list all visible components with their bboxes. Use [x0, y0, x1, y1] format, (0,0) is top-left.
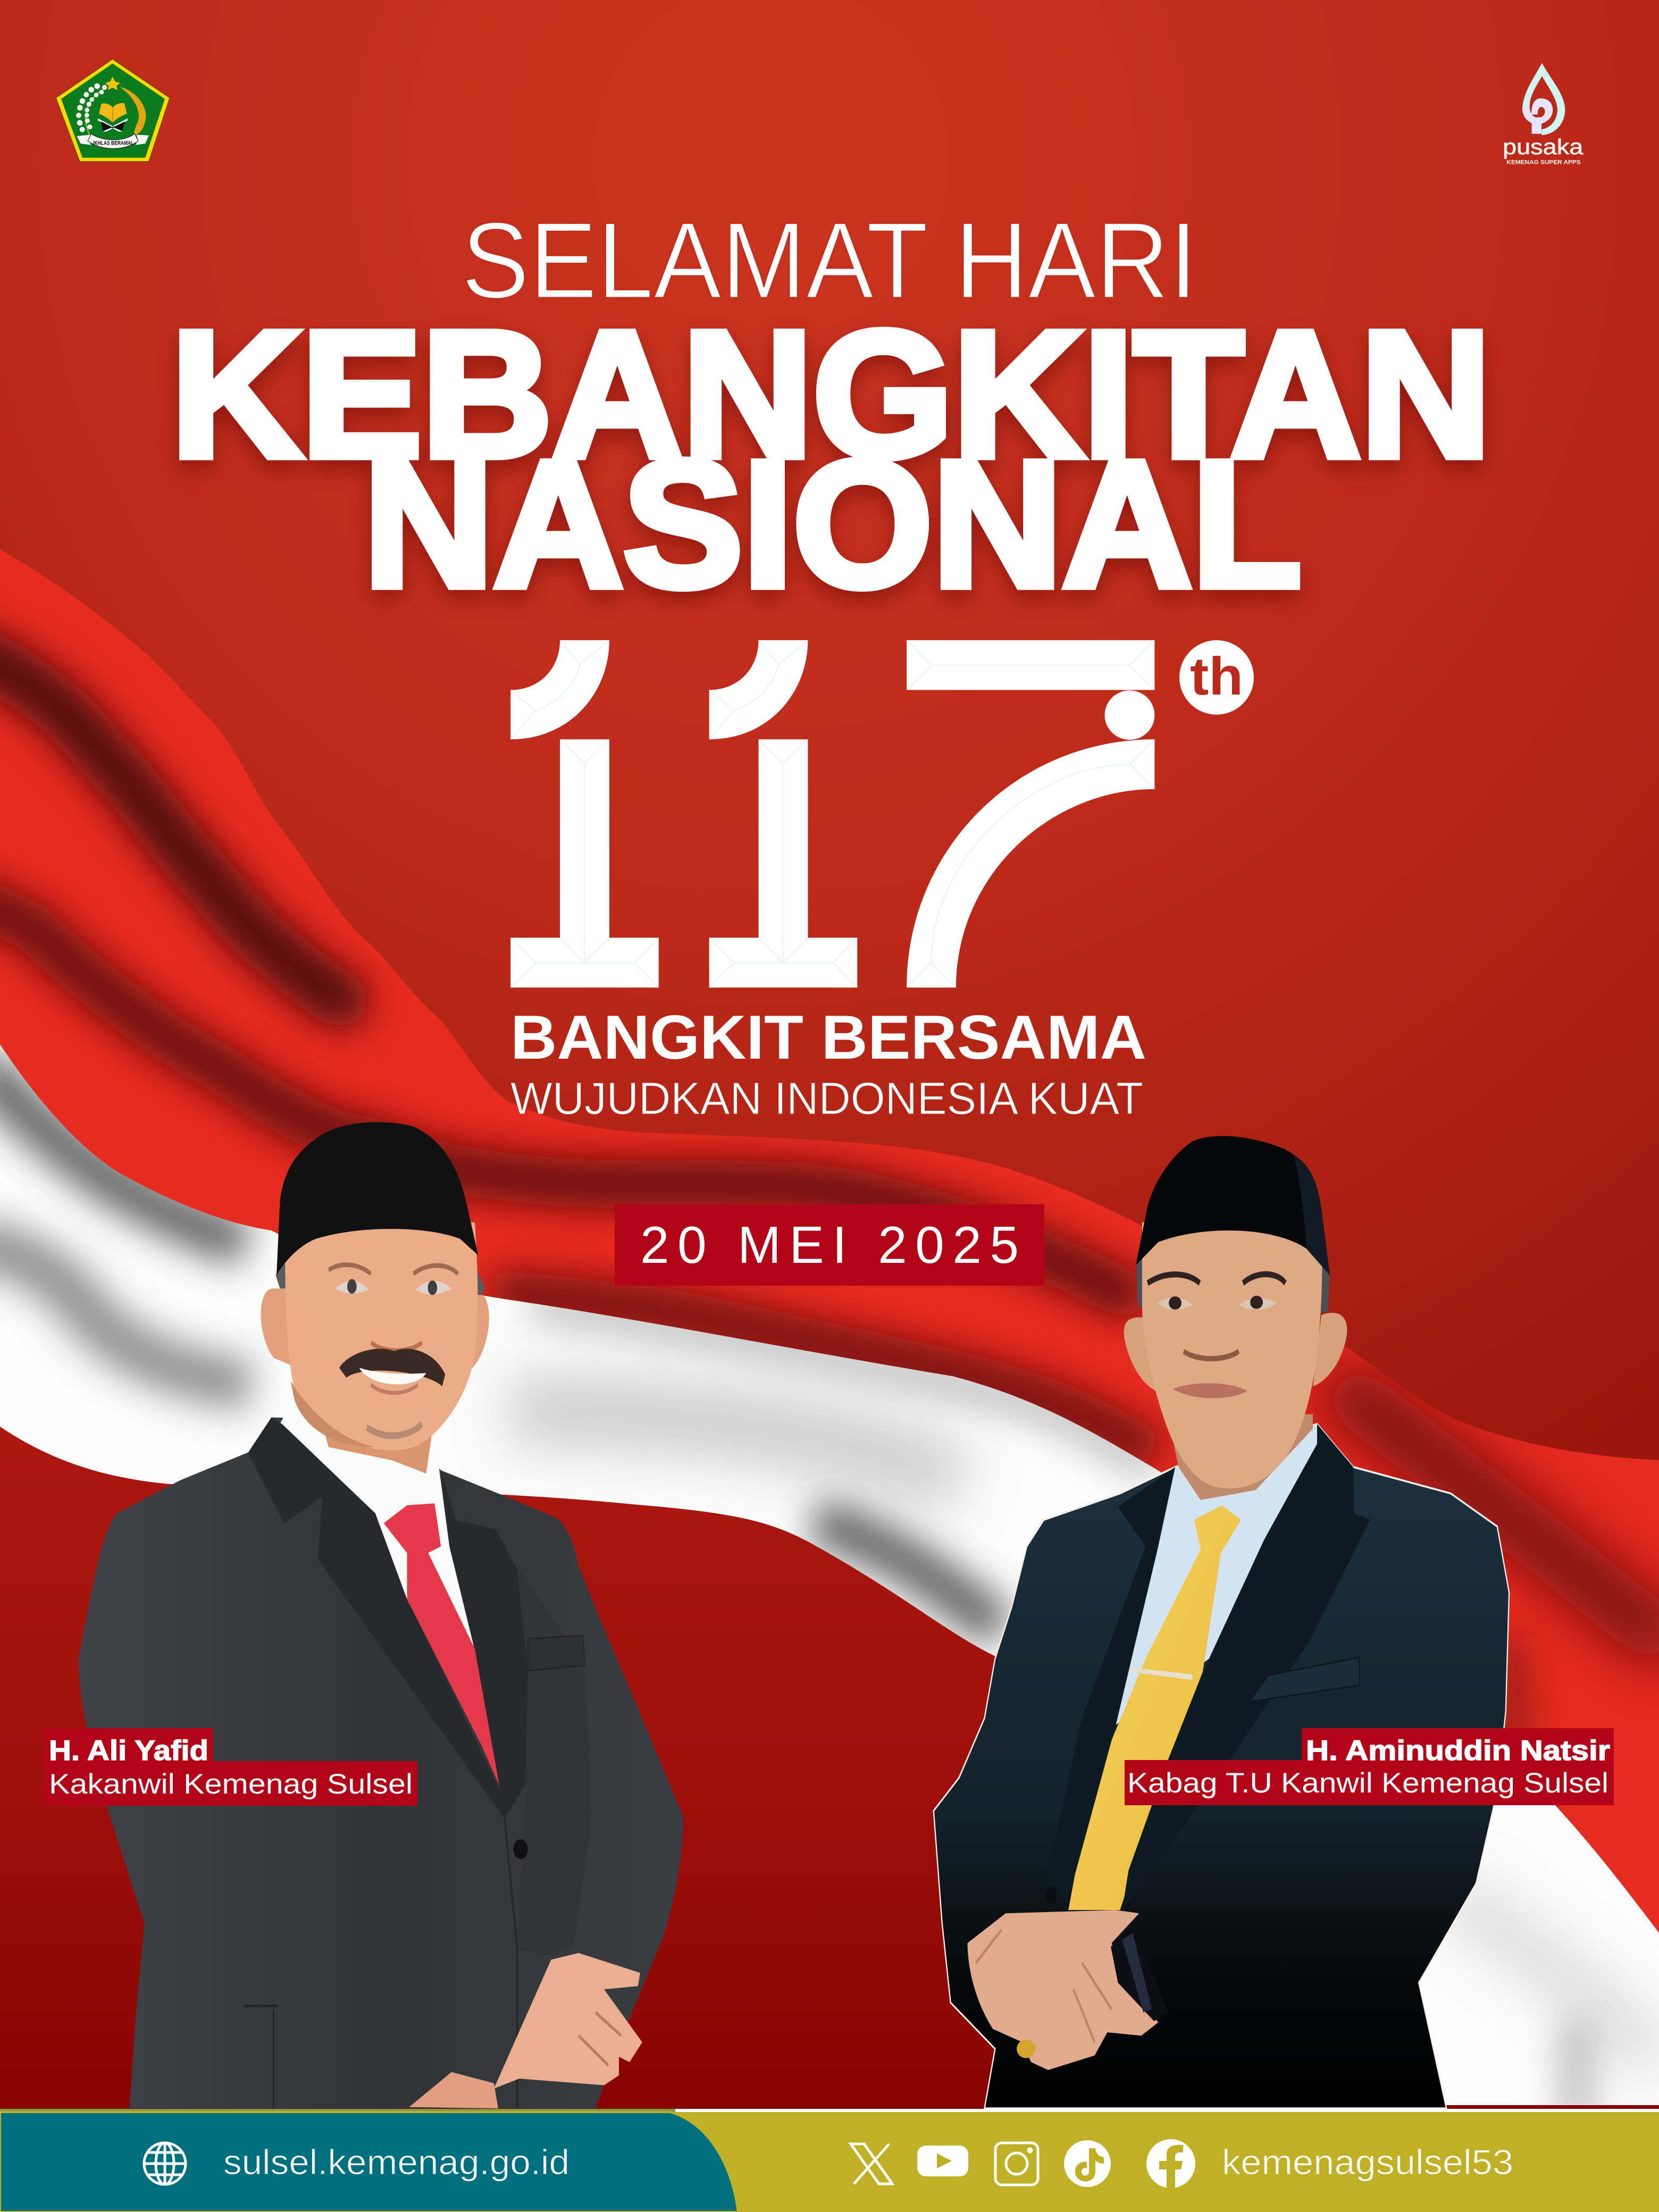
numeral: 117 anniversary mark	[510, 640, 1154, 987]
right official: cap	[1136, 1136, 1330, 1275]
icon: globe	[144, 2143, 186, 2184]
left official: tie	[384, 1503, 499, 1786]
icon: pusaka drop	[1522, 63, 1565, 135]
left official: face	[285, 1222, 478, 1451]
right official: face	[1142, 1222, 1322, 1488]
flag: white band	[0, 1010, 1659, 2127]
date badge: 20 MEI 2025	[640, 1216, 1019, 1274]
person: right official	[934, 1136, 1509, 2108]
title line: Nasional: NASIONAL	[364, 423, 1302, 624]
left official: suit	[79, 1418, 683, 2108]
label: H. Aminuddin Natsir	[1125, 1728, 1614, 1805]
flag: lower dark red	[0, 1382, 1659, 2109]
left official: moustache and smile	[339, 1348, 445, 1386]
tagline: Wujudkan Indonesia Kuat: WUJUDKAN INDONESIA KUAT	[510, 1074, 1143, 1124]
person: left official	[79, 1122, 683, 2108]
tagline: Bangkit Bersama: BANGKIT BERSAMA	[510, 1002, 1146, 1072]
title line: Kebangkitan: KEBANGKITAN	[171, 294, 1491, 495]
label: H. Ali Yafid: H. Ali Yafid	[49, 1735, 208, 1766]
right official: tie	[1068, 1505, 1241, 1910]
right official: ears	[1124, 1313, 1347, 1391]
icon: YouTube	[917, 2146, 968, 2176]
right official: mouth	[1173, 1383, 1247, 1398]
title: Kebangkitan Nasional	[171, 294, 1491, 624]
right official: hand	[968, 1910, 1158, 2070]
logo: Kementerian Agama emblem	[56, 59, 170, 162]
numeral: first 1	[510, 640, 659, 987]
right official: shirt	[1116, 1424, 1317, 1725]
right official: neck	[1169, 1414, 1313, 1500]
left official: cap	[276, 1122, 478, 1275]
badge: th	[1179, 640, 1254, 715]
left official: hair	[275, 1242, 485, 1305]
left official: neck	[312, 1388, 439, 1473]
icon: X	[851, 2144, 892, 2184]
label: H. Aminuddin Natsir: H. Aminuddin Natsir	[1306, 1735, 1610, 1766]
left official: ears	[261, 1288, 489, 1368]
footer: teal website panel	[0, 2112, 738, 2212]
left official: hands	[494, 1953, 642, 2089]
right official: cuff	[1111, 1933, 1169, 2021]
footer: social handle: kemenagsulsel53	[1222, 2142, 1513, 2182]
logo: Kementerian Agama emblem: IKHLAS BERAMAL	[93, 140, 134, 147]
left official: shirt	[280, 1404, 474, 1646]
logo: Pusaka: KEMENAG SUPER APPS	[1506, 159, 1581, 165]
label: H. Ali Yafid: Kakanwil Kemenag Sulsel	[49, 1769, 413, 1800]
left official: lapels	[248, 1418, 528, 1819]
badge: th: th	[1190, 647, 1243, 706]
right official: suit	[934, 1424, 1509, 2108]
right official: hair	[1136, 1239, 1330, 1321]
label: H. Aminuddin Natsir: Kabag T.U Kanwil Kemenag Sulsel	[1127, 1767, 1608, 1799]
left official: eyes	[335, 1281, 451, 1295]
icon: Instagram	[995, 2143, 1038, 2185]
right official: eyes	[1158, 1298, 1277, 1310]
date badge	[615, 1204, 1044, 1286]
footer bar	[0, 2109, 1659, 2212]
title: Selamat Hari: SELAMAT HARI	[462, 200, 1197, 321]
footer: website text: sulsel.kemenag.go.id	[223, 2142, 569, 2182]
right official: lapels	[1048, 1424, 1370, 1910]
icon: TikTok	[1064, 2140, 1111, 2187]
label: H. Ali Yafid	[45, 1728, 417, 1806]
logo: Pusaka	[1503, 63, 1583, 165]
logo: Pusaka: pusaka	[1503, 135, 1583, 159]
flag: waving red and white	[0, 532, 1659, 2127]
numeral: second 1	[709, 640, 857, 987]
numeral: 7	[907, 640, 1154, 987]
icon: Facebook	[1146, 2139, 1195, 2188]
flag: upper red band	[0, 549, 1659, 1933]
